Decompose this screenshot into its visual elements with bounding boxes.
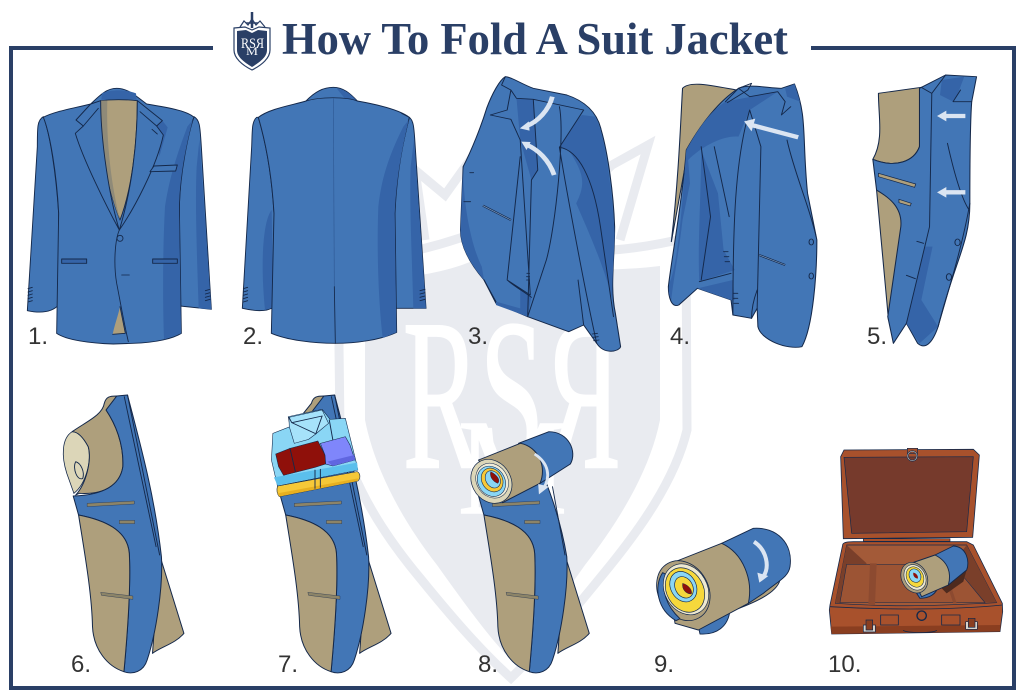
- jacket base: [280, 395, 391, 673]
- red garment: [276, 441, 326, 475]
- step numbers: 10.: [828, 651, 861, 678]
- rolled blue part: [519, 432, 573, 483]
- step numbers: 4.: [670, 323, 690, 350]
- roll end: [463, 453, 519, 510]
- jacket 7: clothes placed on jacket: [271, 395, 391, 673]
- suitcase base: [829, 542, 1003, 634]
- step numbers: 9.: [654, 651, 674, 678]
- jacket 3: sleeves folded over: [461, 77, 621, 351]
- arrows: [937, 111, 965, 198]
- watermark: RSRM crest: M: [458, 393, 567, 543]
- jacket 4: half folded: [668, 83, 817, 347]
- step numbers: 6.: [71, 651, 91, 678]
- step numbers: 7.: [278, 651, 298, 678]
- jacket base: [479, 453, 589, 673]
- step numbers: 8.: [478, 651, 498, 678]
- rolled tan part: [479, 443, 542, 503]
- jacket 8: rolling begins: [463, 432, 589, 673]
- step numbers: 5.: [867, 323, 887, 350]
- arrow: [535, 454, 549, 494]
- rolled jacket in suitcase: [896, 546, 968, 598]
- logo: crest: [234, 12, 270, 70]
- logo: crest: RSЯ: [241, 36, 264, 52]
- jacket 2: back view: [242, 87, 426, 343]
- logo: crest: M: [246, 44, 258, 58]
- jacket 6: flat with sleeve tucked: [63, 395, 184, 673]
- watermark: RSRM crest: RSЯ: [403, 275, 621, 514]
- step numbers: 2.: [243, 323, 263, 350]
- yellow shirt: [277, 472, 360, 497]
- suitcase with rolled jacket: [829, 448, 1003, 634]
- arrow: [744, 119, 798, 137]
- blue shirt: [271, 409, 358, 486]
- arrow: [754, 542, 768, 583]
- purple garment: [320, 437, 355, 466]
- roll end: [646, 551, 721, 630]
- jacket 9: fully rolled: [646, 528, 790, 634]
- step numbers: 3.: [468, 323, 488, 350]
- step numbers: 1.: [28, 323, 48, 350]
- jacket 5: folded in half: [873, 75, 977, 346]
- step numbers: [28, 323, 887, 678]
- suitcase lid: [841, 448, 979, 541]
- title: How To Fold A Suit Jacket: [282, 14, 788, 64]
- watermark: RSRM crest: [338, 145, 687, 678]
- jacket 1: front view: [27, 88, 211, 344]
- arrows: [520, 97, 554, 175]
